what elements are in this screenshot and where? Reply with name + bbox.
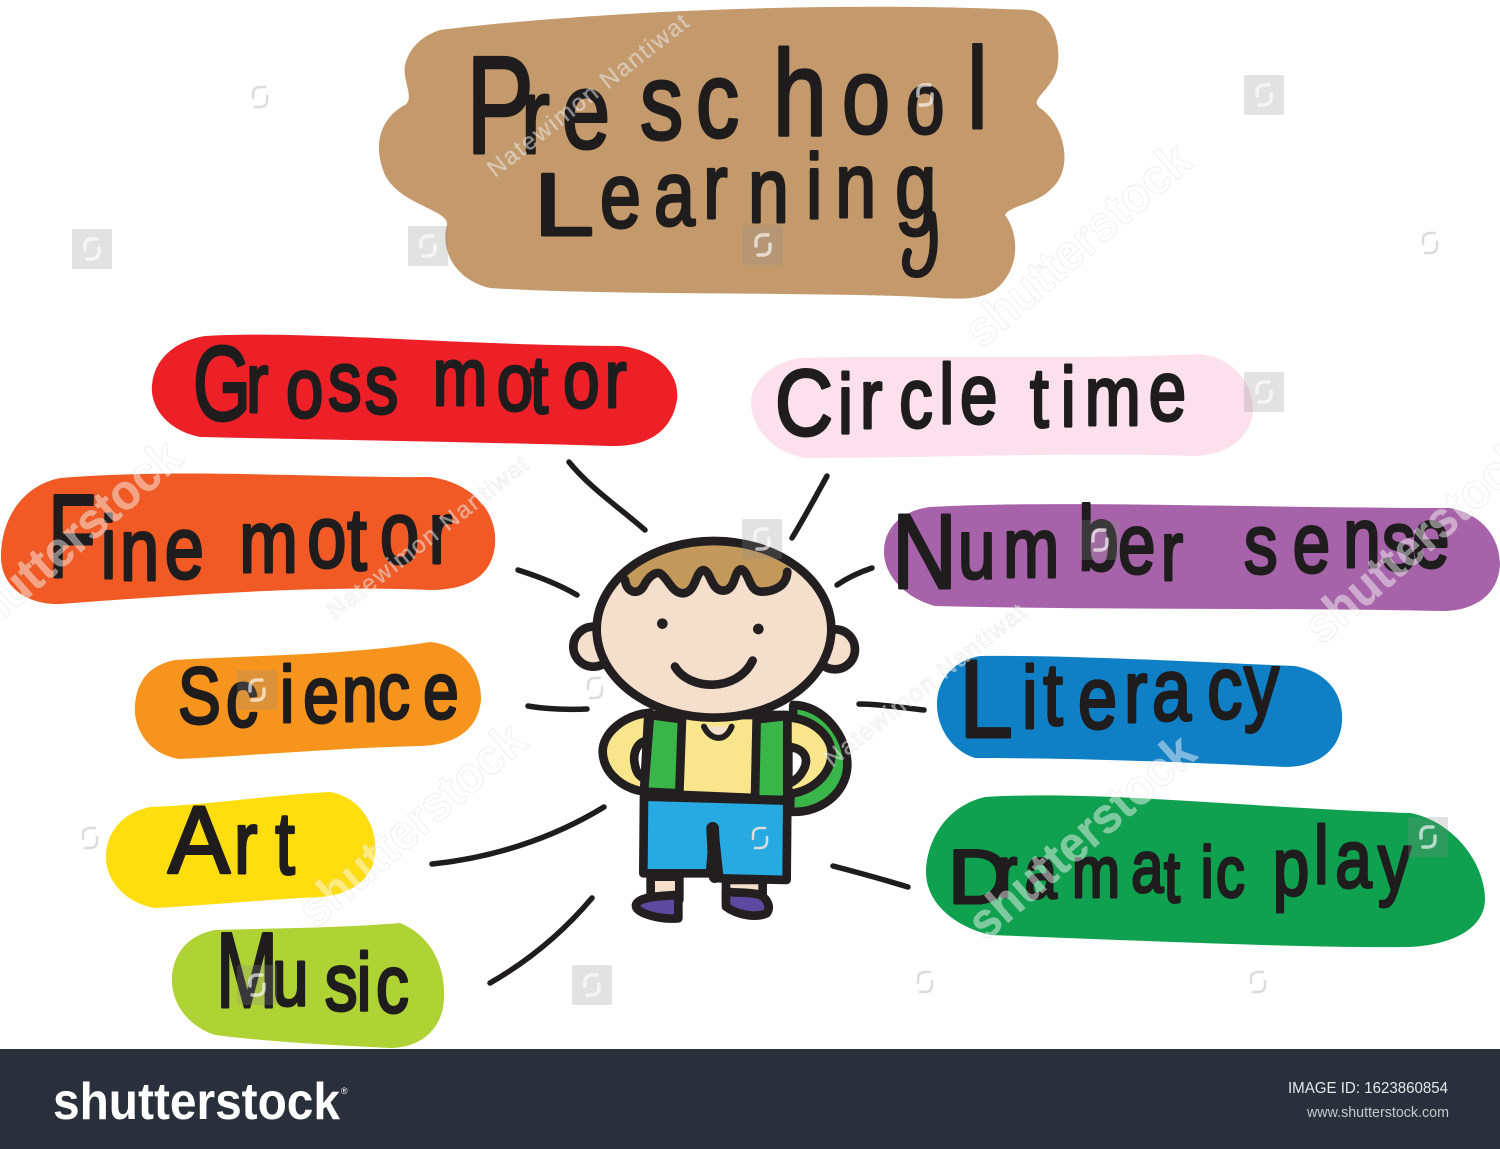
label: music [172, 910, 444, 1048]
label: gross motor: motor [433, 331, 627, 431]
label: art: rt [234, 793, 295, 893]
backpack [790, 705, 847, 812]
straps [644, 715, 787, 800]
label: music: M [216, 910, 278, 1030]
label: circle time: ircle [838, 348, 997, 452]
label: science: Science [178, 646, 459, 744]
title: P [466, 28, 534, 183]
label: art [106, 787, 375, 908]
label: fine motor: ine [101, 498, 204, 599]
head outline [597, 541, 831, 718]
footer logo: shutterstock [53, 1073, 340, 1131]
watermarks: Natewimon Nantiwat [322, 451, 534, 625]
illustration: boy with backpack [573, 530, 855, 919]
label: literacy: iteracy [1022, 634, 1279, 747]
label: fine motor: motor [239, 483, 452, 591]
title [466, 25, 988, 274]
label: number sense: N [892, 493, 957, 611]
website: www.shutterstock.com [1306, 1104, 1449, 1121]
watermarks: shutterstock [952, 131, 1202, 358]
label: literacy: L [959, 638, 1013, 761]
label: number sense: sense [1244, 492, 1449, 592]
label: gross motor: ross [246, 335, 398, 436]
hair [621, 545, 792, 598]
title: earning [600, 134, 936, 247]
arms [603, 713, 832, 794]
rays around the boy [432, 462, 924, 983]
head [597, 541, 831, 718]
watermarks: Natewimon Nantiwat [482, 9, 694, 183]
smile [675, 661, 753, 685]
watermarks: shutterstock [956, 723, 1206, 950]
label: number sense: umber [958, 487, 1183, 599]
label: science [135, 642, 481, 759]
registered mark: ® [341, 1086, 348, 1096]
label: circle time: time [1030, 345, 1186, 446]
label: dramatic play: ramatic [998, 827, 1245, 917]
shorts [643, 797, 787, 880]
label: dramatic play [926, 795, 1485, 947]
label: music: usic [272, 931, 409, 1030]
label: number sense [884, 487, 1500, 611]
footer bar [0, 1049, 1500, 1149]
collar [704, 727, 732, 738]
title: L [534, 155, 594, 254]
legs [651, 877, 763, 900]
label: gross motor [152, 325, 677, 446]
label: gross motor: G [193, 325, 251, 443]
watermarks: shutterstock [286, 711, 536, 938]
label: fine motor: F [48, 471, 96, 603]
label: dramatic play: play [1273, 809, 1411, 913]
label: fine motor [1, 471, 495, 604]
eyes [657, 618, 764, 634]
label: art: A [168, 787, 230, 894]
watermarks: Natewimon Nantiwat [819, 599, 1031, 773]
image id: IMAGE ID: 1623860854 [1288, 1080, 1448, 1097]
shoes [636, 892, 769, 919]
ears [573, 627, 855, 669]
title: resc hool [521, 25, 988, 176]
label: dramatic play: D [948, 835, 1010, 920]
label: circle time: C [775, 350, 833, 455]
label: literacy [937, 634, 1342, 767]
label: circle time [751, 345, 1253, 458]
panel: title banner [379, 7, 1064, 299]
shirt [644, 715, 787, 799]
